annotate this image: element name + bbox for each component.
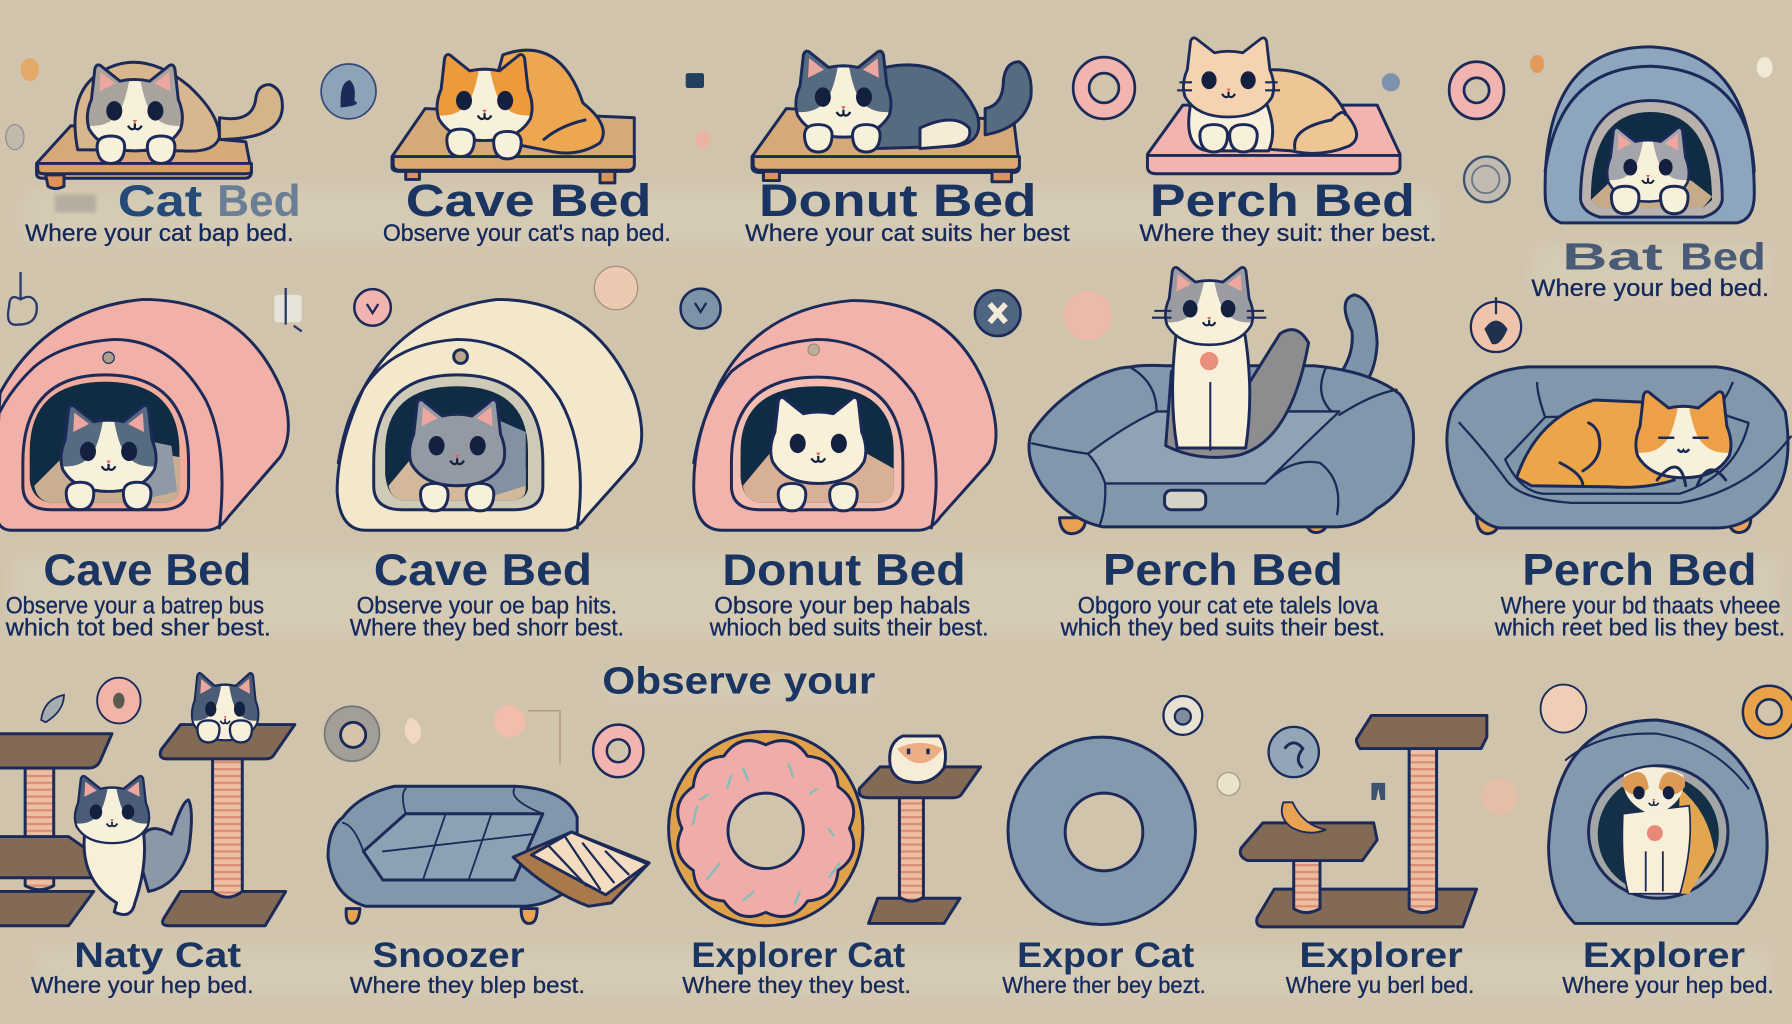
caption: Where they blep best. — [350, 972, 585, 998]
caption: Where they suit: ther best. — [1139, 220, 1437, 247]
illustration: cat tree with small cat — [859, 736, 981, 923]
caption: Where your hep bed. — [31, 972, 254, 998]
illustration: blue ring bed — [1008, 737, 1195, 925]
caption: Where your cat bap bed. — [25, 220, 294, 247]
title: Expor Cat: Expor Cat — [1017, 935, 1195, 975]
title: Snoozer: Snoozer — [373, 935, 525, 975]
illustration: orange cat on platform — [392, 40, 634, 183]
title: Donut Bed: Donut Bed — [722, 546, 966, 595]
caption: which tot bed sher best. — [5, 614, 271, 641]
decorative icons — [6, 55, 1792, 815]
text halos — [11, 189, 1783, 994]
illustration: blue dome with standing cat — [1549, 720, 1767, 923]
caption: Where yu berl bed. — [1286, 972, 1474, 998]
title: Perch Bed: Perch Bed — [1103, 546, 1343, 595]
title: Naty Cat: Naty Cat — [74, 935, 241, 975]
caption: whioch bed suits their best. — [709, 614, 989, 641]
caption: Where they they best. — [682, 972, 911, 998]
illustration: blue cave with cat — [1545, 47, 1754, 223]
title: Donut Bed: Donut Bed — [759, 175, 1037, 226]
title: Bat Bed: Bat — [1562, 236, 1664, 278]
title: Explorer: Explorer — [1583, 935, 1745, 975]
illustration: tan platform cat, grey face — [37, 50, 282, 189]
caption: Where ther bey bezt. — [1002, 972, 1206, 998]
title: Explorer Cat: Explorer Cat — [691, 935, 905, 975]
title: Cat Bed: Cat — [118, 177, 202, 226]
illustration: pink cave with cream cat — [694, 301, 996, 530]
caption: Where your hep bed. — [1562, 972, 1774, 998]
heading: Observe your: Observe your — [602, 660, 876, 702]
illustration: cat tree with two cats — [0, 662, 295, 926]
caption: Obsore your bep habals — [714, 593, 970, 620]
illustration: donut bed — [669, 731, 863, 926]
caption: Observe your cat's nap bed. — [383, 220, 671, 247]
illustration: sleeping orange cat on blue couch — [1447, 367, 1791, 534]
caption: Where they bed shorr best. — [350, 614, 624, 641]
illustration: sitting cat on blue couch — [1029, 254, 1414, 534]
illustration: couch with scratch ramp — [328, 786, 649, 923]
title: Cave Bed: Cave Bed — [406, 175, 651, 226]
illustration: pink cave with cat — [0, 299, 288, 530]
title: Cave Bed: Cave Bed — [43, 546, 251, 595]
title: Perch Bed: Perch Bed — [1522, 546, 1757, 595]
caption: which they bed suits their best. — [1060, 614, 1385, 641]
caption: Where your cat suits her best — [745, 220, 1070, 247]
caption: Observe your a batrep bus — [6, 593, 264, 620]
illustration: peach cat on pink platform — [1147, 38, 1400, 174]
title: Perch Bed: Perch Bed — [1150, 175, 1415, 226]
caption: Where your bed bed. — [1531, 275, 1769, 302]
title: Explorer: Explorer — [1299, 935, 1463, 975]
title: Cat Bed: Bed — [217, 177, 301, 226]
illustration: two-level cat tree — [1240, 715, 1487, 927]
smudge — [55, 194, 96, 213]
title: Cave Bed: Cave Bed — [374, 546, 592, 595]
caption: Obgoro your cat ete talels lova — [1078, 593, 1379, 620]
illustration: cream cave with grey cat — [337, 299, 642, 530]
caption: which reet bed lis they best. — [1494, 614, 1785, 641]
caption: Observe your oe bap hits. — [357, 593, 617, 620]
title: Bat Bed: Bed — [1680, 236, 1766, 278]
illustration: grey cat on platform — [752, 37, 1031, 182]
